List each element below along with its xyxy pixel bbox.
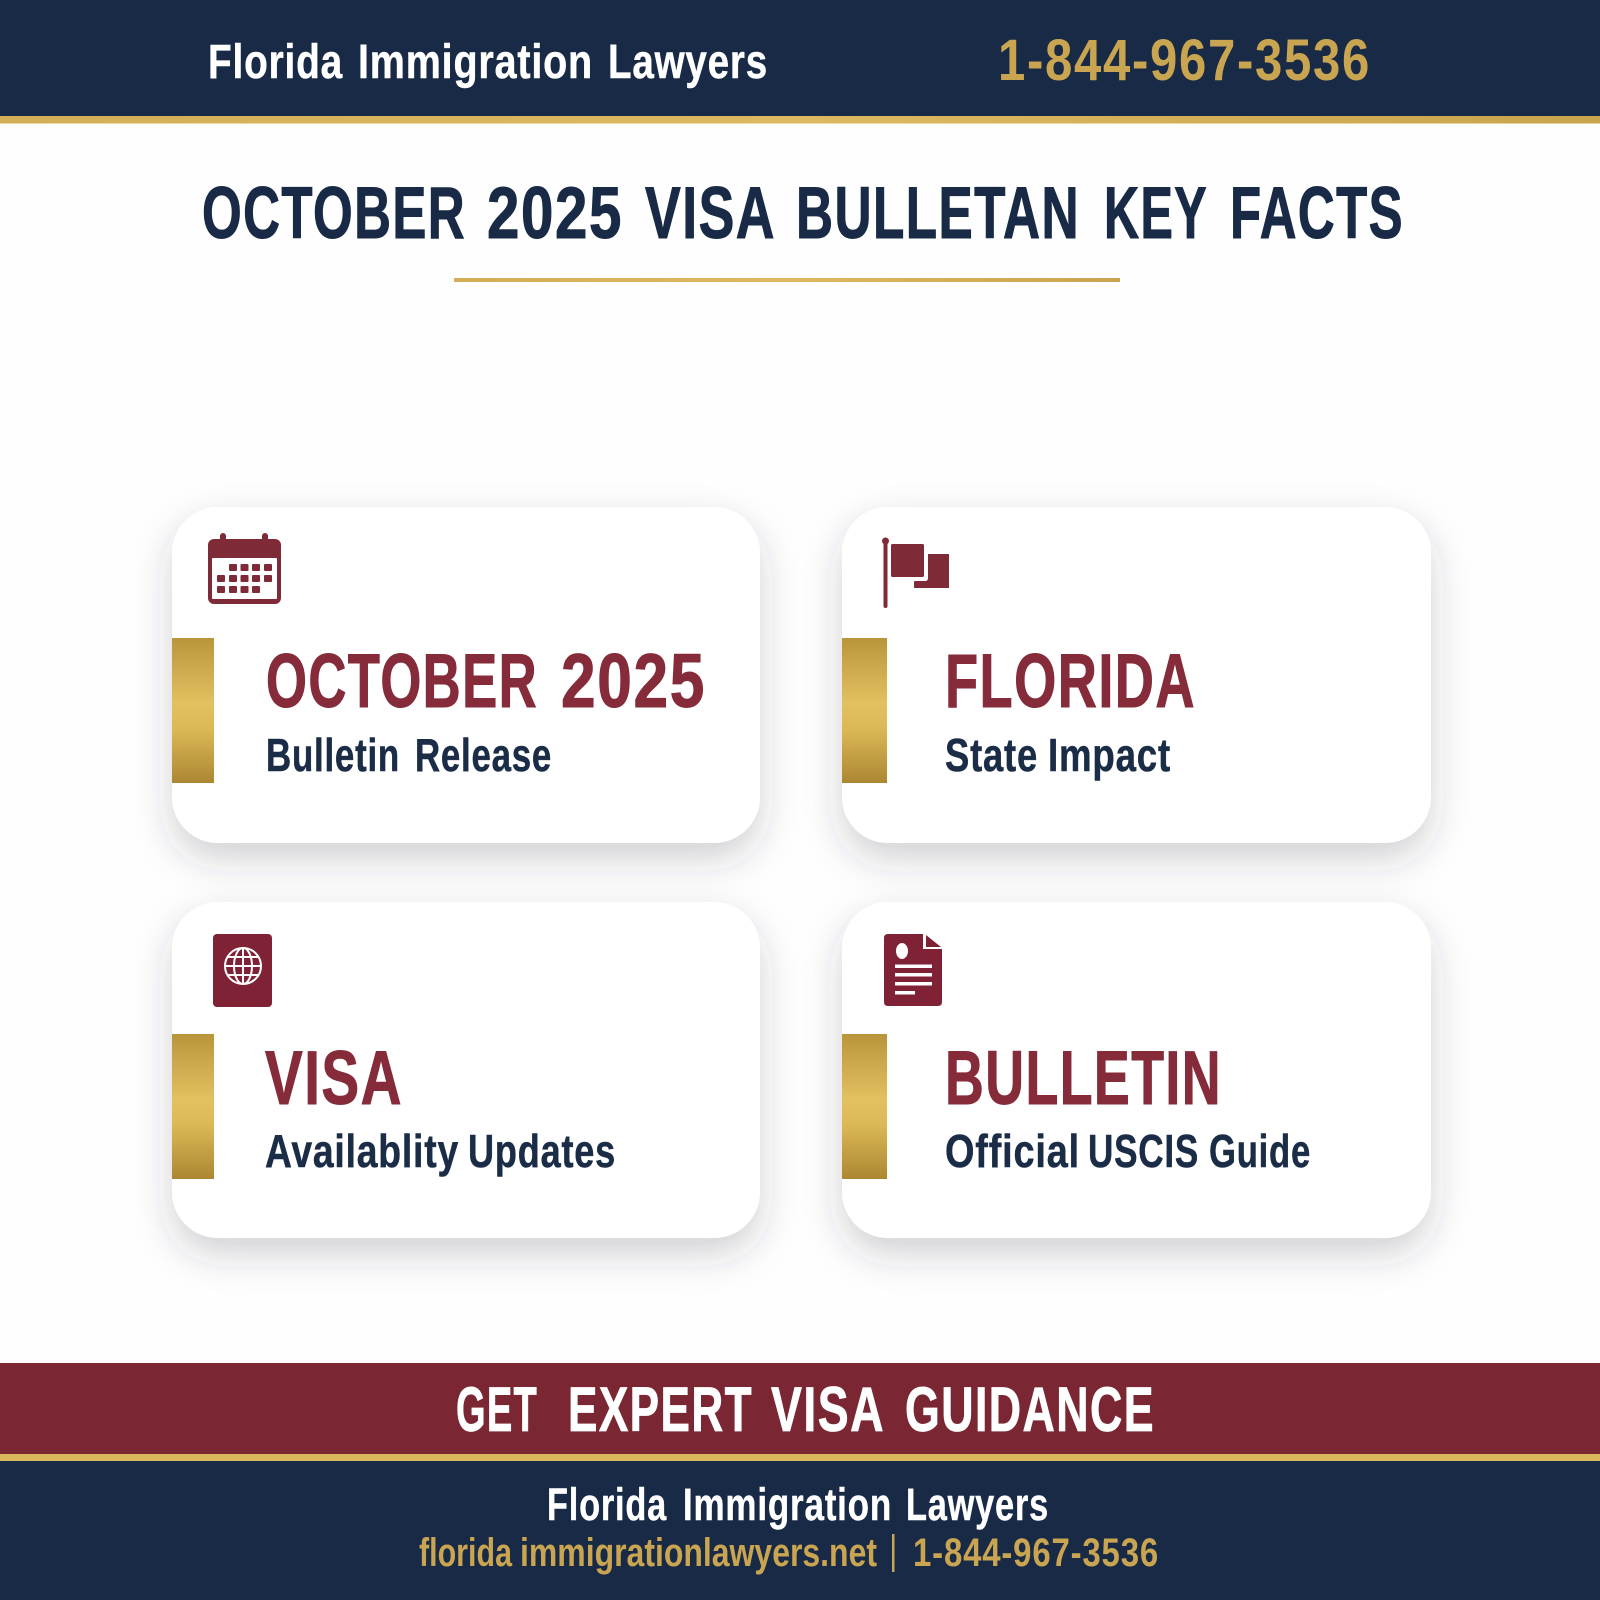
card subheading: Updates <box>468 1125 616 1177</box>
card subheading <box>266 729 552 781</box>
panel: October 2025 <box>172 507 760 843</box>
footer firm name: Lawyers <box>906 1479 1049 1530</box>
title: OCTOBER <box>202 173 466 254</box>
gold accent bar <box>172 1034 214 1179</box>
card heading: FLORIDA <box>945 639 1196 724</box>
header phone number: 1-844-967-3536 <box>998 28 1371 93</box>
header firm name <box>208 36 768 89</box>
header firm name: Florida <box>208 36 343 89</box>
card subheading <box>945 729 1171 781</box>
banner text: VISA <box>771 1375 885 1445</box>
card heading: BULLETIN <box>945 1036 1222 1121</box>
title <box>202 173 1404 254</box>
banner gold divider <box>0 1454 1600 1461</box>
panel: Visa <box>172 902 760 1238</box>
footer firm name: Immigration <box>683 1479 892 1530</box>
card subheading <box>265 1125 616 1177</box>
gold accent bar <box>172 638 214 783</box>
card subheading: State <box>945 729 1038 781</box>
panel: Florida <box>842 507 1431 843</box>
title: FACTS <box>1230 173 1404 254</box>
card heading: OCTOBER <box>266 639 538 724</box>
title: KEY <box>1104 173 1208 254</box>
header firm name: Immigration <box>358 36 593 89</box>
card subheading: Impact <box>1048 729 1171 781</box>
banner text: GUIDANCE <box>905 1375 1155 1445</box>
card subheading: Availablity <box>265 1125 459 1177</box>
footer phone number: 1-844-967-3536 <box>913 1531 1159 1575</box>
footer firm name: Florida <box>547 1479 667 1530</box>
header firm name: Lawyers <box>608 36 768 89</box>
footer website: florida <box>419 1531 513 1575</box>
card subheading: Bulletin <box>266 729 400 781</box>
banner text <box>456 1375 1155 1445</box>
footer separator <box>892 1534 894 1572</box>
title: BULLETAN <box>796 173 1080 254</box>
gold accent bar <box>842 638 887 783</box>
banner text: GET <box>456 1375 538 1445</box>
footer website <box>419 1531 877 1575</box>
card heading: VISA <box>265 1036 403 1121</box>
icon: flags <box>882 538 949 608</box>
banner text: EXPERT <box>568 1375 753 1445</box>
icon: passport with globe <box>213 934 272 1007</box>
footer band <box>0 1461 1600 1600</box>
footer website: immigrationlawyers.net <box>520 1531 877 1575</box>
top header band <box>0 0 1600 124</box>
card subheading <box>945 1125 1311 1177</box>
icon: document <box>884 934 942 1006</box>
footer firm name <box>547 1479 1049 1530</box>
card subheading: Release <box>415 729 552 781</box>
panel: Bulletin <box>842 902 1431 1238</box>
title: 2025 <box>487 173 623 254</box>
icon: calendar <box>208 533 281 604</box>
card heading: 2025 <box>561 639 706 724</box>
card subheading: USCIS <box>1088 1125 1199 1177</box>
call-to-action banner <box>0 1363 1600 1454</box>
title: VISA <box>645 173 776 254</box>
gold accent bar <box>842 1034 887 1179</box>
card subheading: Guide <box>1209 1125 1311 1177</box>
card subheading: Official <box>945 1125 1080 1177</box>
title underline <box>454 278 1120 282</box>
